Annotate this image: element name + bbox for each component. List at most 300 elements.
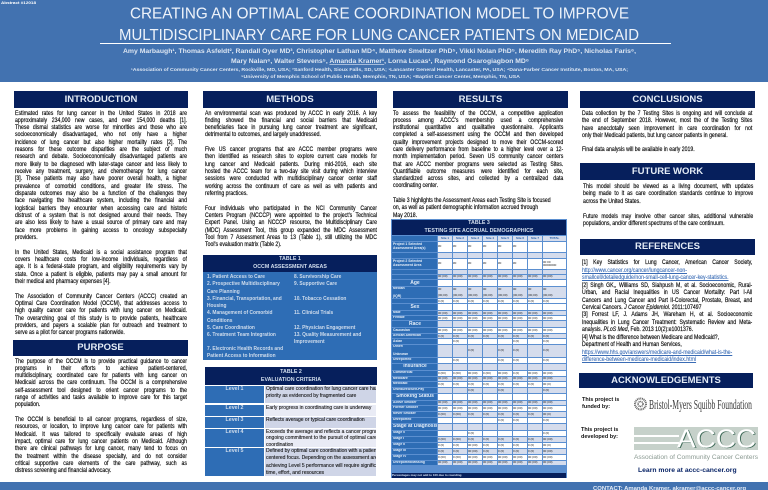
learn more link: Learn more at accc-cancer.org [638,467,737,474]
table 3 data grid: 0 (0) [468,431,474,435]
table 3 data grid: 0 (00) [438,455,446,459]
affiliations: ⁵University of Memphis School of Public Health, Memphis, TN, USA; ⁶Baptist Cancer Center, Memphis, TN, USA [241,74,520,79]
heading: results: RESULTS [459,94,502,105]
table 3 data grid [391,235,567,466]
table 3 data grid: 0 (00) [483,371,491,375]
table 3 data grid: 0 (0) [468,388,474,392]
table 3 data grid: 0 (0) [498,358,504,362]
text: methods: working across the continuum of care as well as with patients and [205,184,377,190]
table 3 data grid: 00 (00) [438,328,448,332]
logo: ACCC [634,427,758,461]
authors: Amy Marbaugh¹, Thomas Asfeldt², Randall Oyer MD³, Christopher Lathan MD⁴, Matthew Smeltzer PhD⁵, Vikki Nolan PhD⁵, Meredith Ray PhD⁵, Nicholas Faris⁶, [123,48,636,55]
table 3 data grid: 00 (00) [528,328,538,332]
heading: results [393,91,568,108]
table 1 left column: Conditions [207,318,232,324]
table 3 data grid: 00 (00) [468,371,478,375]
text: introduction: Estimated rates for lung cancer in the United States in 2018 are [15,110,187,116]
text: conclusions: Final data analysis will be available in early 2019. [582,147,695,153]
text: introduction: The Association of Community Cancer Centers (ACCC) created an [15,294,187,300]
heading: purpose: PURPOSE [77,342,124,353]
table 3 data grid: 00 (00) [543,371,553,375]
table 3 data grid: 0 (0) [513,437,519,441]
table 3 data grid: #0 [438,244,441,248]
table 3 data grid: 0 (0) [498,348,504,352]
table 3 data grid: 0 (0) [483,443,489,447]
heading: acknowledgements: ACKNOWLEDGEMENTS [611,375,721,386]
text: introduction: high quality cancer care for patients with lung cancer on Medicaid. [15,308,187,314]
table 3 data grid: 0 (0) [498,382,504,386]
text: introduction: logistical barriers they encounter when accessing care and historic [15,206,187,212]
table 3 header: TESTING SITE ACCRUAL DEMOGRAPHICS [425,228,533,234]
table 1 right column: Improvement [294,338,325,344]
table 3 data grid: 0 (0) [528,382,534,386]
table 3 data grid: #0 [498,261,501,265]
text: introduction: their medical and pharmacy expenses [4]. [15,279,111,285]
text: methods [204,110,377,248]
text: methods: Tool's evaluation matrix (Table 2). [205,242,281,248]
text: introduction: Optimal Care Coordination Model (OCCM), that addresses access to [15,301,187,307]
text: results: Table 3 highlights the Assessment Areas each Testing Site is focused [393,198,551,204]
table 3 data grid: #0 [498,244,501,248]
table 3 data grid: 0 (0) [468,437,474,441]
table 3 data grid: 0 (0) [513,449,519,453]
table 1 left column: Housing [207,302,226,308]
text: methods: detrimental to outcomes, and largely unaddressed. [205,132,321,138]
text: purpose: programs in their efforts to achieve patient-centered, [15,366,187,372]
table 3 data grid: 00 00 [543,260,551,264]
text: references: Inequalities in Lung Cancer Treatment: Systematic Review and Meta- [582,320,752,326]
table 3 data grid: 0 (0) [498,418,504,422]
text: references: [3] Forrest LF, J. Adams JH, Wareham H, et al. Socioeconomic [582,312,752,318]
table 3 data grid: 0 (0) [468,382,474,386]
table 3 data grid: 0 (0) [453,443,459,447]
table 3 data grid: (00,00) [528,293,538,297]
table 1 left column: 5. Care Coordination [207,324,255,330]
table 3: testing site accrual demographics [391,219,567,478]
table 3 data grid: #0 [468,244,471,248]
table 3 data grid: 0 (0) [543,431,549,435]
table 1 left column: 4. Management of Comorbid [207,310,272,316]
table 3 data grid: 0 (0) [528,437,534,441]
table 3 data grid: 0 (0) [513,339,519,343]
table 3 data grid: Assessment Area [393,263,421,267]
table 3 header: TABLE 3 [468,220,490,226]
level 1 [205,386,376,403]
table 3 data grid: Site 7 [531,236,539,240]
table 3 data grid: Site 1 [441,236,449,240]
text: methods: sessions were conducted with multidisciplinary cancer center staff [205,176,377,182]
table 3 data grid: 0 (0) [528,449,534,453]
table 3 data grid: #0 [513,244,516,248]
table 3 data grid: Site 3 [471,236,479,240]
table 3 data grid: 00 (00) [483,406,493,410]
text: purpose: The OCCM is beneficial to all cancer programs, regardless of size, [15,417,187,423]
table 3 data grid: 00 (00) [513,406,523,410]
table 3 data grid: 0 (0) [513,412,519,416]
text: future work: being made to it as care coordination standards continue to improve [583,191,753,197]
table 3 data grid: 0 (00) [453,412,461,416]
table 3 data grid: Site 4 [486,236,494,240]
text: introduction: reasons for these outcome disparities are the subject of much [15,147,187,153]
text: introduction: covers healthcare costs for low-income individuals, regardless of [15,257,187,263]
text: introduction: socioeconomically disadvantaged, who not only have a higher [15,132,187,138]
table 3 data grid: 0 (0) [543,358,549,362]
table 3 data grid: 0 (0) [498,437,504,441]
table 3 data grid: 00 (00) [528,371,538,375]
table 3 data grid: 0 (0) [543,339,549,343]
table 3 data grid: (IQR) [393,294,401,298]
text: future work: Future models may involve other cancer sites, additional vulnerable [583,214,753,220]
text: introduction: receive any treatment, surgery, and chemotherapy for lung cancer [15,169,187,175]
table 3 data grid: 00 (00) [483,328,493,332]
text: introduction: prevalence of comorbid conditions, and greater life stress. The [15,184,187,190]
table 3 data grid: 00 [483,287,486,291]
table 3 data grid: #0 [438,261,441,265]
table 3 data grid: 00 [543,287,546,291]
table 3 data grid: 00 (00) [468,443,478,447]
table 3 data grid: Assessment Area(s) [393,246,425,250]
table 2: evaluation criteria: priority as evidenced by fragmented care [266,393,356,399]
table 1 left column: 6. Treatment Team Integration [207,332,276,338]
table 3 data grid: 0 (0) [498,449,504,453]
table 3 data grid: 00 (00) [483,455,493,459]
table 3 data grid: 00 (00) [498,328,508,332]
heading: conclusions [580,91,755,108]
text: methods: Tool from 7 Assessment Areas to 13 (Table 1), still utilizing the MDC [205,235,377,241]
text: results: care delivery performance from baseline to a higher level over a 12- [393,147,563,153]
table 1 right column: 12. Physician Engagement [294,324,355,330]
table 1 left column: 1. Patient Access to Care [207,274,265,280]
text: introduction: disparate outcomes may also be a function of the challenges they [15,191,187,197]
table 3 data grid: 00 (00) [543,455,553,459]
heading: references: REFERENCES [635,241,700,252]
text: references: [4] What is the difference between Medicare and Medicaid?, [582,335,719,341]
text: introduction: are also less likely to have a usual source of primary care and may [15,220,187,226]
text: conclusions [582,110,752,153]
text: purpose: there are clinical pathways for lung cancer, many tend to focus on [15,446,187,452]
table 3 data grid: (00,00) [438,293,448,297]
text: methods: finding showed the financial and social barriers that Medicaid [205,118,377,124]
table 3 data grid: 0 (0) [453,358,459,362]
authors: Mary Nalan⁶, Walter Stevens⁵, Amanda Kramer¹ , Lorna Lucas¹, Raymond Osarogiagbon MD⁶ [231,58,529,65]
text: references: Department of Health and Human Services, [582,342,682,348]
table 3 data grid: 0 (0) [483,437,489,441]
table 3 data grid: 00 (00) [468,328,478,332]
text: funded by: This project is [582,397,619,403]
table 1 right column: 10. Tobacco Cessation [294,296,346,302]
table 3 data grid: 00 (00) [528,406,538,410]
table 3 data grid: 0 (0) [513,443,519,447]
text: introduction: In the United States, Medicaid is a social assistance program that [15,250,187,256]
table 1 left column: 2. Prospective Multidisciplinary [207,280,280,286]
text: references: difference-between-medicare-medicaid/index.html [582,357,696,363]
text: results: Quantifiable outcome measures were identified for each site, [393,169,563,175]
table 3 data grid: 00 (0) [543,382,551,386]
text: results [393,110,564,219]
text: references: analysis. PLoS Med, Feb. 2013 10(2):e1001376. [582,327,693,333]
table 3 data grid: Project 2 Selected [393,259,422,263]
text: methods: Five US cancer programs that are ACCC member programs were [205,147,377,153]
table 3 data grid: 00 (00) [498,371,508,375]
text: methods: hosted the ACCC team for a two-day site visit during which interview [205,169,377,175]
text: introduction: The overarching goal of this study is to provide patients, healthcare [15,316,187,322]
heading: purpose [13,340,188,356]
text: purpose: resources, or location, to improve lung cancer care for patients with [15,424,187,430]
text: introduction [15,110,187,336]
table 3 data grid: 00 (00) [498,406,508,410]
heading: references [580,239,755,255]
text: results: institutional quantitative and qualitative questionnaire. Applicants [393,125,563,131]
text: references: Cancers and Lung Cancer and Part II-Colorectal, Prostate, Breast, and [582,298,752,304]
table 3 data grid: (00,00) [498,293,508,297]
text: references: Cervical Cancers. J Cancer Epidemiol. 2011:107497 [582,305,702,311]
table 2 header: TABLE 2 [280,369,302,375]
text: references [582,259,752,363]
table 1 right column: 8. Survivorship Care [294,274,341,280]
table 3 data grid: 0 (0) [543,388,549,392]
text: future work: across the United States. [583,198,641,204]
table 1 left column: 7. Electronic Health Records and [207,346,283,352]
text: purpose: Medicaid. It was tailored to specifically evaluate areas of high [15,432,187,438]
table 3 data grid: 0 (00) [453,371,461,375]
title: CREATING AN OPTIMAL CARE COORDINATION MODEL TO IMPROVE [130,6,629,22]
text: future work [583,183,754,227]
heading: methods [203,91,377,108]
table 2: evaluation criteria: Reflects average or typical care coordination [266,417,365,423]
table 3 data grid: #0 [453,244,456,248]
table 3 data grid: #0 [453,261,456,265]
table 2: evaluation criteria: Level 2 [226,405,243,411]
table 3 data grid: 00 (00) [513,328,523,332]
table 3 data grid: 0 (0) [543,348,549,352]
text: introduction: distrust of a system that is not designed around their needs. They [15,213,187,219]
table 3 data grid: 00 (00) [513,455,523,459]
table 3 data grid: (00,00) [453,293,463,297]
text: purpose: range of activities and tasks available to improve care for this target [15,395,187,401]
table 3 data grid: 0 (0) [438,443,444,447]
text: results: process among ACCC's membership used a comprehensive [393,118,563,124]
text: results: To assess the feasibility of the OCCM, a competitive application [393,110,563,116]
level 4 [205,429,376,447]
table 3 data grid: 00 (00) [543,449,553,453]
table 3 data grid: 0 (0) [543,418,549,422]
table 3 data grid: 0 (0) [498,388,504,392]
text: introduction: research and debate. Socioeconomically disadvantaged patients are [15,154,187,160]
table 1 header: OCCM ASSESSMENT AREAS [253,264,327,270]
text: references: https://www.hhs.gov/answers/medicare-and-medicaid/what-is-the- [582,350,732,356]
text: references: smallcell/detailedguide/non-small-cell-lung-cancer-key-statistics. [582,275,729,281]
table 3 data grid: 0 (0) [483,412,489,416]
table 3 data grid: 00 (00) [468,406,478,410]
table 1 right column: 13. Quality Measurement and [294,332,361,338]
text: references: [2] Singh GK,, Williams SD, Siahpush M, et al. Socioeconomic, Rural- [582,283,752,289]
text: methods: Four individuals who participated in the NCI Community Cancer [205,206,377,212]
table 2: evaluation criteria [205,367,377,476]
text: future work: This model should be viewed as a living document, with updates [583,184,753,190]
text: introduction: more likely to be diagnosed with later-stage cancer and less likely to [15,162,187,168]
text: results: completed a self-assessment using the OCCM and then developed [393,132,563,138]
table 3 data grid: 0 (0) [468,412,474,416]
table 3 data grid: 0 (00) [453,437,461,441]
table 3 data grid: 0 (00) [438,371,446,375]
text: introduction: providers, and payers a scalable plan for outreach and treatment to [15,323,187,329]
text: introduction: incidence of lung cancer but also higher mortality rates [2]. The [15,140,187,146]
text: methods: Expert Panel. Using an NCCCP resource, the Multidisciplinary Care [205,220,377,226]
text: introduction: [3]. These patients may also have poorer overall health, a higher [15,176,187,182]
text: methods: lung cancer and Medicaid patients. During mid-2016, each site [205,162,377,168]
table 3 data grid: 0 (0) [513,371,519,375]
table 3 data grid: 00 [498,287,501,291]
table 1 left column: Care Planning [207,288,240,294]
text: methods: then identified as research sites to explore current care models for [205,154,377,160]
table 3 data grid: 0 (0) [513,382,519,386]
table 3 data grid: 0 (0) [498,412,504,416]
level 5 [205,448,376,476]
table 3 data grid: #0 [483,244,486,248]
text: purpose: distress screening and financial advocacy. [15,468,111,474]
table 3 data grid: 0 (0) [453,339,459,343]
table 3 data grid: 00 (00) [498,455,508,459]
table 3 data grid: 0 (0) [483,382,489,386]
text: purpose: population. [15,402,40,408]
table 3 data grid: (00,00) [513,293,523,297]
heading: methods: METHODS [266,94,314,105]
table 3 data grid: 00 (00) [438,406,448,410]
text: introduction: face navigating the healthcare system, including the financial and [15,198,187,204]
table 3 data grid: 00 (00) [468,449,478,453]
heading: future work: FUTURE WORK [632,166,703,177]
heading: introduction [14,91,188,108]
table 2: evaluation criteria: ongoing commitment to the pursuit of optimal care [266,435,376,441]
text: developed by: developed by: [581,434,618,440]
table 3 data grid: (00,00) [543,293,553,297]
table 3 data grid: 0 (0) [468,348,474,352]
table 3 data grid: 00 [438,287,441,291]
table 3 data grid: 0 (00) [453,455,461,459]
table 3 data grid: 00 [468,287,471,291]
affiliations: ¹Association of Community Cancer Centers, Rockville, MD, USA; ²Sanford Health, Sioux Falls, SD, USA; ³Lancaster General Health, Lancaster, PA, USA; ⁴Dana-Farber Cancer Institute, Boston, MA, USA; [131,67,628,72]
text: results: quality improvement projects designed to move their OCCM-scored [393,140,563,146]
text: methods: (MDC) Assessment Tool, this group expanded the MDC Assessment [205,228,377,234]
table 3 data grid: 00 (00) [468,455,478,459]
text: results: standardized across sites, and collected by a centralized data [393,176,563,182]
text: introduction: providers. [15,235,38,241]
table 3 data grid: Site 2 [456,236,464,240]
text: methods: referring practices. [205,191,248,197]
logo: ACCC: Association of Community Cancer Centers [634,454,758,461]
table 1 left column: Patient Access to Information [207,352,276,358]
text: conclusions: the end of September 2018. However, most the of the Testing Sites [582,118,752,124]
table 3 data grid: 0 (00) [438,437,446,441]
text: introduction: approximately 234,000 new cases, and over 154,000 deaths [1]. [15,118,187,124]
text: methods: Centers Program (NCCCP) were appointed to the project's Technical [205,213,377,219]
text: purpose: the treatment within the disease specialty, and do not consider [15,454,187,460]
text: introduction: state. Once a patient is eligible, patients may pay a small amount for [15,272,187,278]
table 1 header [203,255,377,272]
table 3 data grid: 0 (0) [453,382,459,386]
text: results: on, as well as patient demographic information accrued through [393,205,538,211]
text: introduction: These dismal statistics are worse for minorities and those who are [15,125,187,131]
table 3 data grid: 00 [513,287,516,291]
table 1 header: TABLE 1 [279,256,301,262]
table 3 data grid: 0 (0) [528,412,534,416]
table 3 data grid: 00 (00) [543,406,553,410]
table 2 header: EVALUATION CRITERIA [261,377,321,383]
text: purpose: The purpose of the OCCM is to provide practical guidance to cancer [15,358,187,364]
level 2 [205,405,376,416]
table 2: evaluation criteria: Level 3 [226,417,243,423]
text: references: [1] Key Statistics for Lung Cancer, American Cancer Society, [582,260,752,266]
header banner [0,0,768,82]
text: results: that are ACCC member programs were selected as Testing Sites. [393,162,563,168]
table 2: evaluation criteria: Level 4 [226,429,243,435]
table 3 data grid: 0 (0) [483,449,489,453]
table 3 data grid: 00 (0) [543,443,551,447]
table 3 data grid: 00 (0) [543,412,551,416]
table 3 data grid: Project 1 Selected [393,242,422,246]
table 1 left column: 3. Financial, Transportation, and [207,296,282,302]
text: results: month implementation period. Seven US community cancer centers [393,154,563,160]
table 3 data grid: 00 (00) [543,328,553,332]
text: purpose: critical supportive care elements of the care pathway, such as [15,461,187,467]
table 2 header [205,367,377,385]
table 3 data grid: 00 (00) [528,455,538,459]
text: results: May 2018. [393,213,417,219]
table 3 data grid: 0 (0) [498,443,504,447]
table 3 data grid: #0 [468,261,471,265]
text: references: Urban, and Racial Inequalities in US Cancer Mortality: Part I-All [582,290,752,296]
table 3 data grid: 00 [528,287,531,291]
table 1 left column [207,274,283,358]
table 3 data grid: 00 [453,287,456,291]
text: results: coordinating center. [393,183,438,189]
table 3 data grid: 0 (0) [513,418,519,422]
text: introduction: face more problems in gaining access to oncology subspecialty [15,228,187,234]
table 1 right column: 11. Clinical Trials [294,310,333,316]
affiliations [131,67,628,79]
title [119,6,639,44]
text: introduction: serve as a pilot for cancer programs nationwide. [15,330,125,336]
table 3 data grid: 0 (0) [438,449,444,453]
text: purpose: Medicaid across the care continuum. The OCCM is a comprehensive [15,380,187,386]
text: conclusions: only their Medicaid patients, but lung cancer patients in general. [582,133,728,139]
table 3 data grid: #0 [513,261,516,265]
heading: future work [580,163,755,180]
text: conclusions: Data collection by the 7 Testing Sites is ongoing and will conclude at [582,110,752,116]
footer bar [0,482,768,490]
text: funded by [582,397,620,410]
level 3 [205,417,376,428]
text: conclusions: have anecdotally seen improvement in care coordination for not [582,126,752,132]
heading: acknowledgements [579,373,753,388]
text: developed by [581,426,618,440]
table 3 data grid: Site 5 [501,236,509,240]
table 2: evaluation criteria: Level 5 [226,448,243,454]
heading: introduction: INTRODUCTION [65,94,137,105]
text: developed by: This project is [581,426,618,432]
table 3 header [392,220,566,235]
text: purpose: multidisciplinary, coordinated care for patients with lung cancer on [15,373,187,379]
text: references: http://www.cancer.org/cancer/lungcancer-non- [582,268,687,274]
text: purpose [15,358,187,474]
table 2: evaluation criteria: Level 1 [226,386,243,392]
table 3 data grid: 0 (0) [438,382,444,386]
table 3 data grid: TOTAL [550,236,559,240]
table 1 right column [294,274,361,344]
table 3 data grid: 0 (00) [438,412,446,416]
authors [123,48,636,65]
text: purpose: impact, optimal care for lung cancer patients on Medicaid. Although [15,439,187,445]
